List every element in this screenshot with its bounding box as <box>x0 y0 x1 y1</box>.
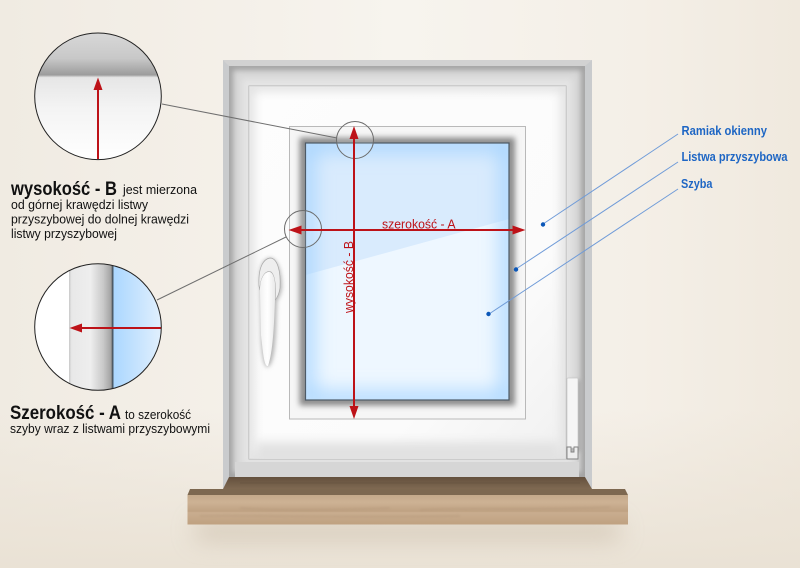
wall recess frame <box>223 60 592 489</box>
text block: width description: to szerokość <box>125 408 191 422</box>
text block: width description: szyby wraz z listwami przyszybowymi <box>10 422 210 436</box>
magnifier ring: left <box>284 210 322 248</box>
text block: height description: od górnej krawędzi listwy <box>11 198 149 212</box>
sash frame <box>249 86 566 466</box>
callout: Ramiak okienny: Ramiak okienny <box>682 123 768 138</box>
detail circle: height <box>34 33 162 160</box>
window handle <box>259 258 282 367</box>
leader line: left circle <box>157 237 286 300</box>
window illustration <box>188 60 628 540</box>
leader line: top circle <box>162 104 337 138</box>
text block: height description: wysokość - B <box>10 179 117 200</box>
label: szerokość - A: szerokość - A <box>382 216 456 232</box>
text block: height description <box>10 179 197 241</box>
arrow: height B <box>350 126 358 419</box>
window sill <box>188 477 628 540</box>
text block: height description: jest mierzona <box>122 183 197 197</box>
label: wysokość - B: wysokość - B <box>341 241 356 314</box>
text block: width description: Szerokość - A <box>10 403 121 424</box>
detail circle: width <box>34 263 162 391</box>
callout: Szyba: Szyba <box>681 176 713 191</box>
glazing bead <box>290 126 526 419</box>
text block: width description <box>10 403 210 436</box>
callout: Szyba <box>486 176 713 316</box>
hinge <box>567 378 581 459</box>
glass pane <box>306 143 509 400</box>
arrow: width A <box>288 226 526 234</box>
magnifier ring: top <box>336 122 374 158</box>
callout: Listwa przyszybowa <box>514 149 788 272</box>
text block: height description: listwy przyszybowej <box>11 227 117 241</box>
callout: Ramiak okienny <box>541 123 768 227</box>
text block: height description: przyszybowej do dolnej krawędzi <box>11 212 189 226</box>
